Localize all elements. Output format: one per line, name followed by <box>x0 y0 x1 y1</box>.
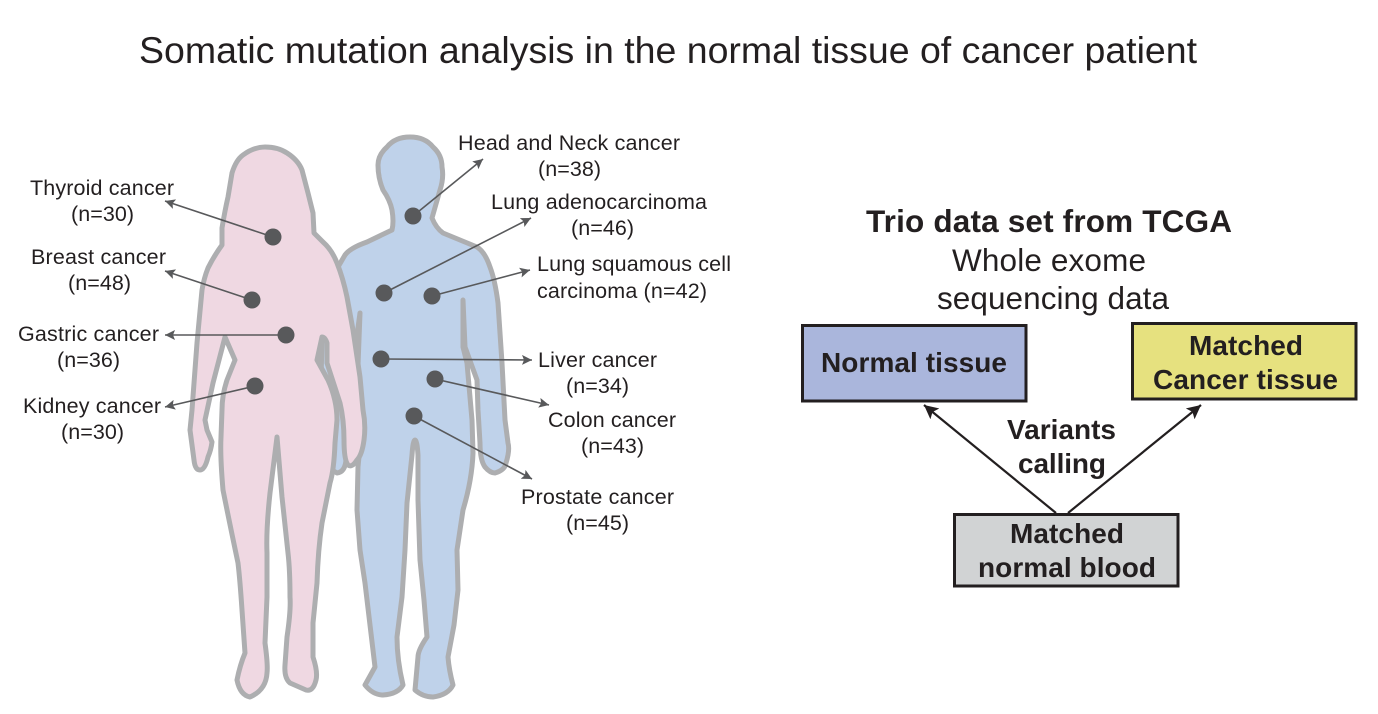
marker: liver cancer <box>372 350 532 368</box>
box: matched normal blood: Matched <box>1010 518 1124 549</box>
label: colon cancer: Colon cancer <box>548 408 676 432</box>
label: kidney cancer: (n=30) <box>61 420 124 444</box>
label: gastric cancer: (n=36) <box>57 348 120 372</box>
label: head and neck cancer: (n=38) <box>538 157 601 181</box>
label: lung squamous cell carcinoma: carcinoma (n=42) <box>537 279 707 303</box>
label: kidney cancer <box>23 394 161 444</box>
box: normal tissue <box>802 326 1026 401</box>
label: variants calling <box>1007 414 1116 479</box>
label: lung adenocarcinoma: Lung adenocarcinoma <box>491 190 707 214</box>
marker: breast cancer <box>165 271 260 308</box>
text: whole exome sequencing data: Whole exome <box>952 242 1146 278</box>
male silhouette <box>320 137 509 697</box>
box: matched normal blood: normal blood <box>978 552 1156 583</box>
label: thyroid cancer <box>30 176 174 226</box>
heading: trio data set: Trio data set from TCGA <box>866 203 1232 239</box>
label: lung adenocarcinoma <box>491 190 707 240</box>
label: lung adenocarcinoma: (n=46) <box>571 216 634 240</box>
text: whole exome sequencing data: sequencing data <box>937 280 1169 316</box>
label: gastric cancer: Gastric cancer <box>18 322 159 346</box>
box: matched cancer tissue: Matched <box>1189 330 1303 361</box>
marker: kidney cancer <box>165 378 264 407</box>
label: kidney cancer: Kidney cancer <box>23 394 161 418</box>
label: breast cancer <box>31 245 166 295</box>
text: whole exome sequencing data <box>937 242 1169 316</box>
title: Somatic mutation analysis in the normal tissue of cancer patient <box>139 29 1198 71</box>
label: breast cancer: (n=48) <box>68 271 131 295</box>
label: thyroid cancer: Thyroid cancer <box>30 176 174 200</box>
label: colon cancer: (n=43) <box>581 434 644 458</box>
label: prostate cancer: Prostate cancer <box>521 485 674 509</box>
marker: lung squamous cell carcinoma <box>424 270 530 304</box>
box: matched cancer tissue: Cancer tissue <box>1153 364 1338 395</box>
label: head and neck cancer: Head and Neck cancer <box>458 131 680 155</box>
marker: prostate cancer <box>406 408 532 479</box>
label: variants calling: calling <box>1018 448 1106 479</box>
label: thyroid cancer: (n=30) <box>71 202 134 226</box>
label: colon cancer <box>548 408 676 458</box>
label: liver cancer <box>538 348 657 398</box>
female silhouette <box>190 147 365 697</box>
marker: gastric cancer <box>165 326 294 344</box>
marker: head and neck cancer <box>404 159 483 224</box>
marker: colon cancer <box>426 370 549 405</box>
label: liver cancer: Liver cancer <box>538 348 657 372</box>
arrow: blood to normal tissue <box>924 405 1056 513</box>
arrow: blood to cancer tissue <box>1068 405 1201 513</box>
marker: lung adenocarcinoma <box>376 218 531 302</box>
label: head and neck cancer <box>458 131 680 181</box>
marker: thyroid cancer <box>165 201 282 246</box>
label: breast cancer: Breast cancer <box>31 245 166 269</box>
label: prostate cancer <box>521 485 674 535</box>
box: normal tissue: Normal tissue <box>821 347 1007 378</box>
label: gastric cancer <box>18 322 159 372</box>
box: matched normal blood <box>954 514 1178 586</box>
panel: body figures <box>190 137 509 697</box>
label: liver cancer: (n=34) <box>566 374 629 398</box>
label: variants calling: Variants <box>1007 414 1116 445</box>
label: lung squamous cell carcinoma <box>537 252 731 303</box>
label: prostate cancer: (n=45) <box>566 511 629 535</box>
label: lung squamous cell carcinoma: Lung squamous cell <box>537 252 731 276</box>
box: matched cancer tissue <box>1132 324 1356 399</box>
